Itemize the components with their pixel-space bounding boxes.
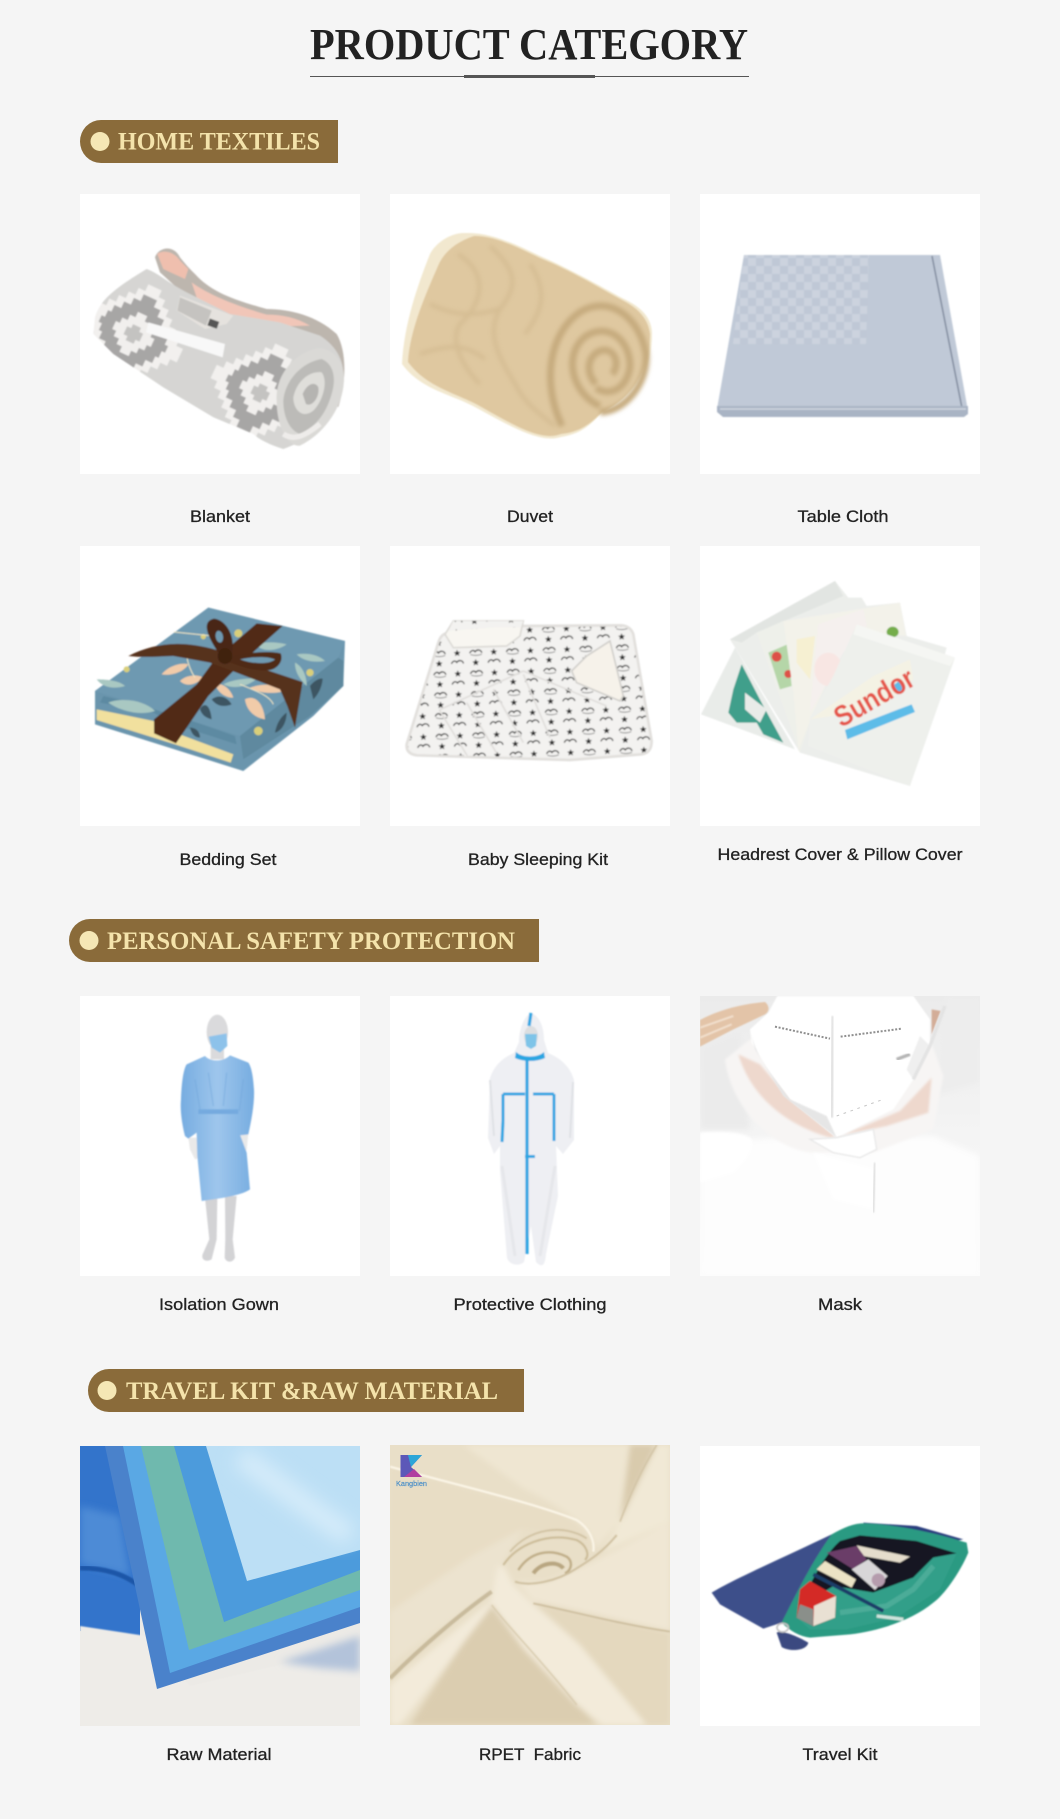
icon: folded table cloth <box>717 255 968 417</box>
card: baby sleeping kit <box>390 546 670 826</box>
card: blanket <box>80 194 360 474</box>
label: travel kit: Travel Kit <box>802 1745 878 1764</box>
icon: gown on mannequin <box>181 1015 254 1262</box>
icon: wrapped bedding set <box>95 608 345 771</box>
title underline <box>310 75 749 78</box>
card: table cloth <box>700 194 980 474</box>
label: baby sleeping kit: Baby Sleeping Kit <box>468 850 608 869</box>
card: protective clothing <box>390 996 670 1276</box>
icon: fanned packaged covers <box>701 581 955 786</box>
label: RPET fabric: RPET Fabric <box>479 1745 581 1764</box>
card: RPET fabric <box>390 1445 670 1725</box>
icon: swirled fabric folds <box>390 1445 670 1725</box>
section heading: personal safety protection: PERSONAL SAFETY PROTECTION <box>107 928 515 955</box>
label: table cloth: Table Cloth <box>798 507 888 526</box>
section heading: home textiles <box>80 120 338 163</box>
icon: fanned packaged covers: Sundor <box>828 662 920 734</box>
icon: brand logo: Kangbien <box>396 1479 427 1488</box>
icon: rolled blanket <box>93 249 344 449</box>
card: duvet <box>390 194 670 474</box>
section heading: travel kit and raw material: TRAVEL KIT &RAW MATERIAL <box>126 1378 498 1405</box>
label: blanket: Blanket <box>190 507 250 526</box>
icon: protective coverall <box>488 1013 574 1265</box>
icon: baby mat with pillow <box>407 621 652 760</box>
card: isolation gown <box>80 996 360 1276</box>
card: mask photo <box>700 996 980 1212</box>
label: protective clothing: Protective Clothing <box>454 1295 606 1314</box>
section heading: personal safety protection <box>69 919 539 962</box>
icon: open zip pouch <box>712 1523 968 1650</box>
card: travel kit <box>700 1446 980 1726</box>
label: bedding set: Bedding Set <box>180 850 277 869</box>
label: headrest and pillow cover: Headrest Cover & Pillow Cover <box>718 845 963 864</box>
label: duvet: Duvet <box>507 507 553 526</box>
icon: brand logo <box>396 1455 427 1488</box>
section heading: travel kit and raw material <box>88 1369 524 1412</box>
card: headrest and pillow covers <box>700 546 980 826</box>
icon: person wearing mask and hood <box>700 996 956 1212</box>
label: raw material: Raw Material <box>166 1745 272 1764</box>
card: bedding set <box>80 546 360 826</box>
card: raw material <box>80 1446 360 1726</box>
icon: rolled duvet <box>402 233 652 439</box>
icon: stacked fabric sheets <box>80 1446 360 1689</box>
label: mask: Mask <box>818 1295 863 1314</box>
label: isolation gown: Isolation Gown <box>159 1295 279 1314</box>
title: PRODUCT CATEGORY <box>310 20 748 69</box>
section heading: home textiles: HOME TEXTILES <box>118 128 320 156</box>
